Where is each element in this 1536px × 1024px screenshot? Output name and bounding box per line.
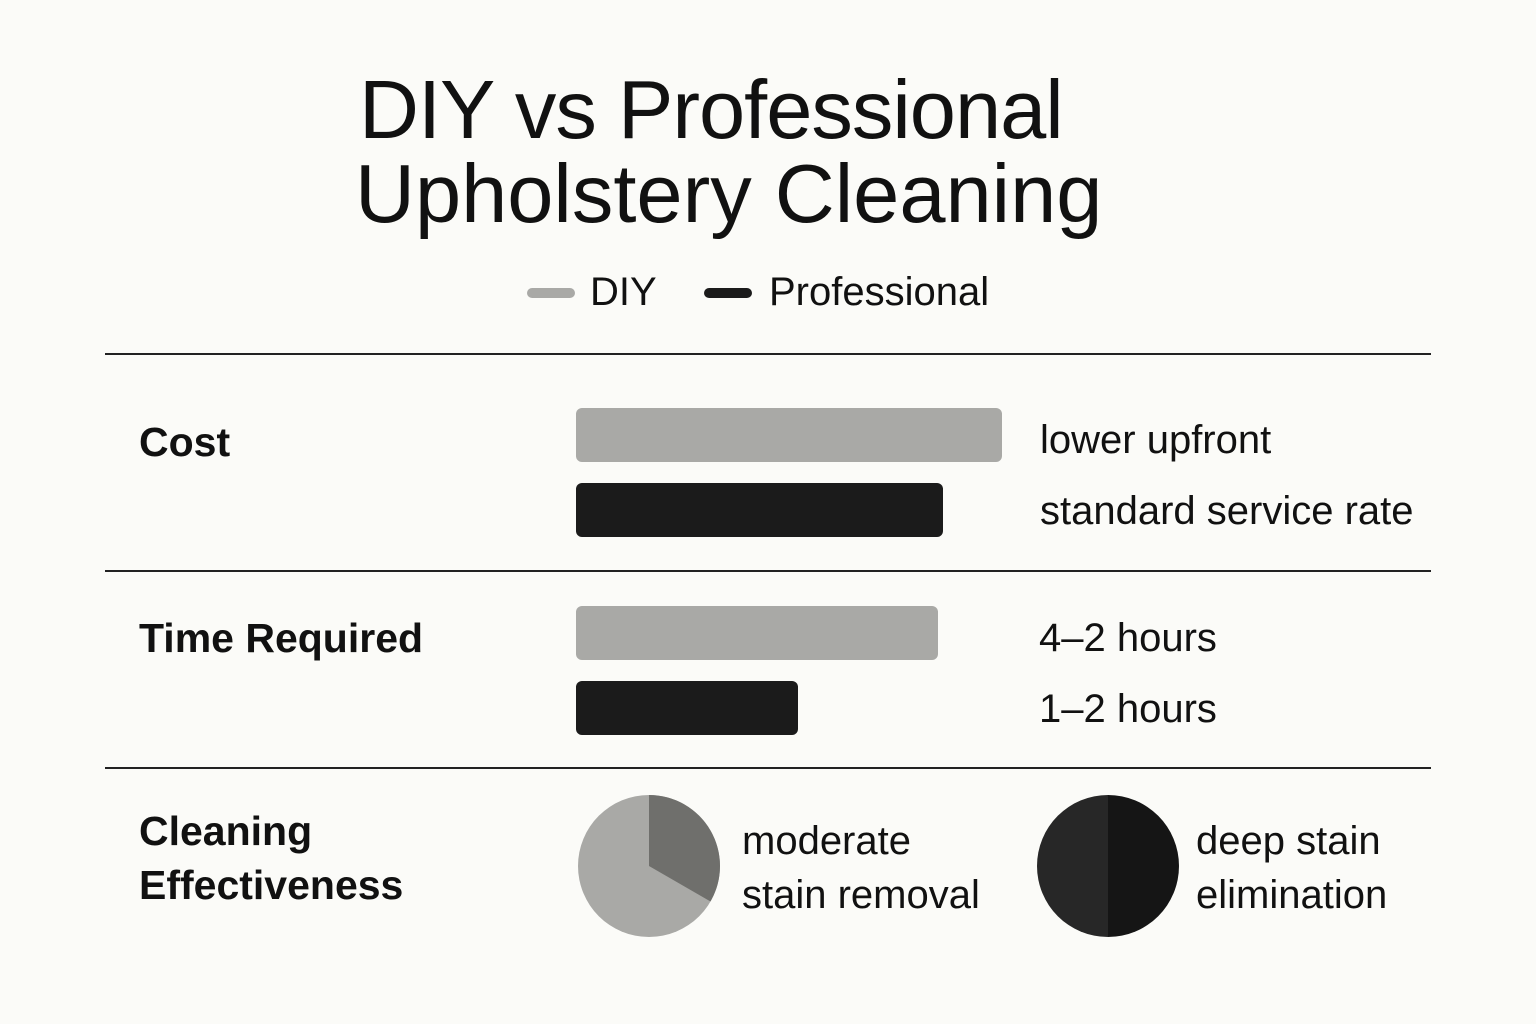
- legend: DIY: [527, 270, 657, 314]
- DIY pie text: [742, 819, 980, 917]
- effectiveness label: [139, 808, 403, 908]
- time DIY text: 4–2 hours: [1039, 616, 1217, 660]
- cost DIY text: lower upfront: [1040, 418, 1271, 462]
- time DIY bar: [576, 606, 938, 660]
- cost label: Cost: [139, 419, 230, 465]
- cost DIY bar: [576, 408, 1002, 462]
- time label: Time Required: [139, 615, 423, 661]
- effectiveness label: Cleaning: [139, 808, 312, 854]
- Pro pie text: [1196, 819, 1387, 917]
- time Pro text: 1–2 hours: [1039, 687, 1217, 731]
- row: cost: [139, 408, 1414, 537]
- legend: Professional: Professional: [769, 270, 989, 314]
- DIY pie: [578, 795, 720, 937]
- row: effectiveness: [139, 795, 1387, 937]
- row: time: [139, 606, 1217, 735]
- legend: [527, 270, 989, 314]
- legend: DIY: DIY: [590, 270, 657, 314]
- Pro pie text: elimination: [1196, 873, 1387, 917]
- cost Pro text: standard service rate: [1040, 489, 1414, 533]
- title: DIY vs Professional: [359, 63, 1063, 156]
- DIY pie text: stain removal: [742, 873, 980, 917]
- cost Pro bar: [576, 483, 943, 537]
- title: [355, 63, 1102, 240]
- Pro pie text: deep stain: [1196, 819, 1381, 863]
- DIY pie text: moderate: [742, 819, 911, 863]
- effectiveness label: Effectiveness: [139, 862, 403, 908]
- time Pro bar: [576, 681, 798, 735]
- title: Upholstery Cleaning: [355, 147, 1102, 240]
- Pro pie: [1037, 795, 1179, 937]
